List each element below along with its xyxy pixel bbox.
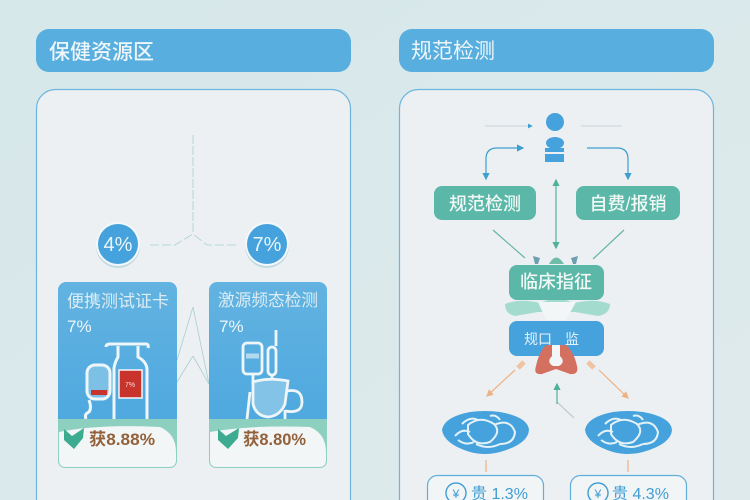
box: 自费/报销	[576, 186, 680, 220]
box: 临床指征	[509, 265, 604, 300]
icon: left blue lung shape	[442, 411, 529, 454]
icon: spray bottle and pouch: 7%	[125, 382, 135, 389]
box: blue label	[509, 321, 604, 356]
card: left	[58, 282, 177, 468]
icon: lungs	[535, 345, 577, 374]
box: 规范检测	[434, 186, 536, 220]
panel: right	[400, 90, 714, 500]
connector: dashed tree	[150, 135, 238, 384]
box: 临床指征: 临床指征	[520, 272, 592, 292]
box: 规范检测: 规范检测	[449, 193, 521, 214]
badge: 4%	[96, 222, 140, 268]
icon: check	[218, 428, 239, 449]
badge: 7%	[245, 222, 289, 268]
card title: 激源频态检测	[218, 291, 318, 310]
result strip: 获8.88%	[89, 430, 155, 449]
box: blue label: 规口	[524, 331, 552, 347]
card title: 便携测试证卡	[67, 292, 169, 311]
heading: left section	[36, 29, 351, 72]
heading: left section: 保健资源区	[49, 41, 154, 64]
card: right	[209, 282, 327, 468]
icon: drip and cup	[243, 330, 302, 419]
heading: right section	[399, 29, 714, 72]
card value: 7%	[219, 317, 244, 336]
box: right result	[570, 476, 686, 500]
icon: teal splash	[505, 300, 610, 320]
box: 自费/报销: 自费/报销	[589, 194, 667, 214]
heading: right section: 规范检测	[411, 40, 495, 63]
box: blue label: 监	[565, 331, 579, 347]
card value: 7%	[67, 317, 92, 336]
badge: 4%: 4%	[104, 234, 133, 256]
result strip: 获8.80%	[243, 430, 306, 449]
icon: check	[64, 428, 84, 449]
badge: 7%: 7%	[253, 234, 282, 256]
arrows: top flow	[485, 126, 628, 259]
icon: spray bottle and pouch	[85, 344, 148, 419]
result strip	[209, 419, 327, 468]
icon: right blue lung shape	[585, 411, 672, 454]
panel: left	[36, 90, 714, 500]
arrows: lower flow	[486, 362, 628, 472]
icon: person	[545, 113, 564, 162]
icon: small figures	[533, 256, 578, 264]
result strip	[58, 419, 177, 468]
box: left result	[428, 476, 544, 500]
